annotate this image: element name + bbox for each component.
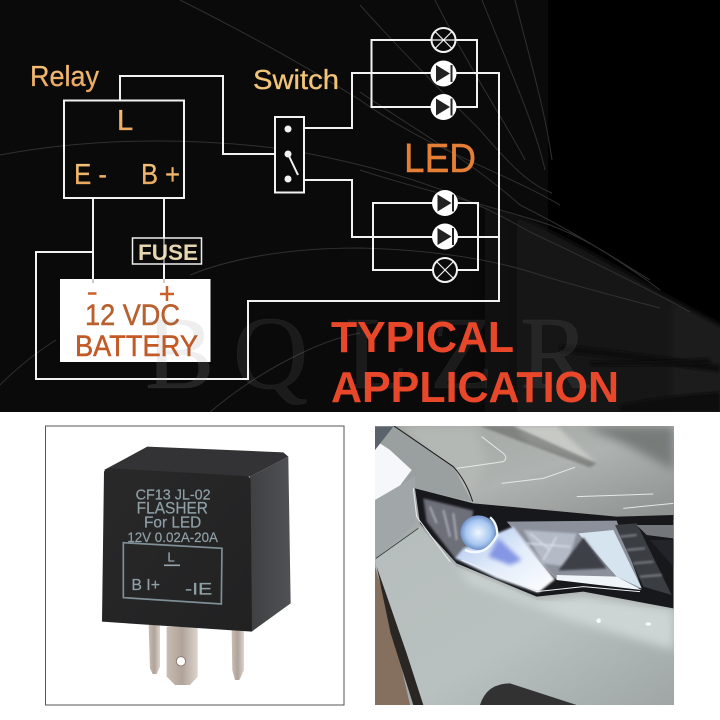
pins xyxy=(149,625,244,685)
relay marking text: For LED xyxy=(144,514,201,531)
heading: TYPICAL APPLICATION: TYPICAL xyxy=(331,313,514,362)
watermark: BQLZR xyxy=(148,318,590,405)
relay marking text: FLASHER xyxy=(137,498,208,517)
relay front xyxy=(102,468,252,632)
panel: relay photo xyxy=(46,426,344,705)
relay marking text: CF13 JL-02 xyxy=(136,487,211,503)
battery xyxy=(60,279,210,388)
relay marking text xyxy=(127,487,219,598)
label: Relay: Relay xyxy=(30,61,99,93)
housing xyxy=(415,488,673,608)
hood xyxy=(393,426,674,520)
dark diagram panel xyxy=(0,0,720,430)
highlights xyxy=(596,618,601,623)
left fender highlight xyxy=(413,488,450,562)
main blue reflector xyxy=(455,527,555,593)
relay box: L xyxy=(117,105,133,137)
heading: TYPICAL APPLICATION xyxy=(331,322,616,402)
relay box: B + xyxy=(141,159,180,191)
switch xyxy=(275,117,304,192)
left chrome xyxy=(423,498,473,558)
battery: BATTERY xyxy=(75,330,198,363)
decorative wing fan xyxy=(0,0,720,430)
heading: TYPICAL APPLICATION: APPLICATION xyxy=(331,363,619,412)
battery: 12 VDC xyxy=(85,299,180,332)
label: Switch: Switch xyxy=(253,64,339,95)
icon: upper LED 2 xyxy=(430,94,456,120)
icon: lower LED 1 xyxy=(432,190,458,216)
white reflector wedge xyxy=(578,530,642,588)
fuse label: FUSE xyxy=(138,240,198,265)
relay marking text: B I+ xyxy=(131,577,160,594)
relay side xyxy=(250,457,291,632)
icon: upper LED 1 xyxy=(430,60,456,86)
icon: lower LED 2 xyxy=(432,224,458,250)
relay box xyxy=(64,100,184,198)
watermark: BQLZR: Q xyxy=(233,296,308,411)
relay marking text: -IE xyxy=(185,579,212,598)
lens xyxy=(460,515,496,550)
bottom chrome line xyxy=(462,560,640,592)
panel: car headlight photo xyxy=(375,426,674,705)
icon: lower lamp xyxy=(433,258,457,282)
watermark: BQLZR: B xyxy=(145,296,214,411)
middle chrome xyxy=(507,521,642,588)
relay marking text: 12V 0.02A-20A xyxy=(127,529,219,545)
headlight assembly xyxy=(415,488,673,608)
watermark: BQLZR: L xyxy=(345,296,409,411)
watermark: BQLZR: Z xyxy=(430,296,494,411)
decorative reflections xyxy=(457,437,673,508)
body xyxy=(375,426,472,560)
relay marking text: L xyxy=(167,549,175,564)
relay top xyxy=(104,447,288,477)
label: LED: LED xyxy=(404,135,476,181)
relay box: E - xyxy=(74,159,107,191)
striped right trim xyxy=(615,523,672,595)
battery: B xyxy=(145,296,214,411)
watermark: BQLZR: R xyxy=(520,296,590,411)
wires xyxy=(36,40,500,379)
icon: upper lamp xyxy=(432,28,456,52)
